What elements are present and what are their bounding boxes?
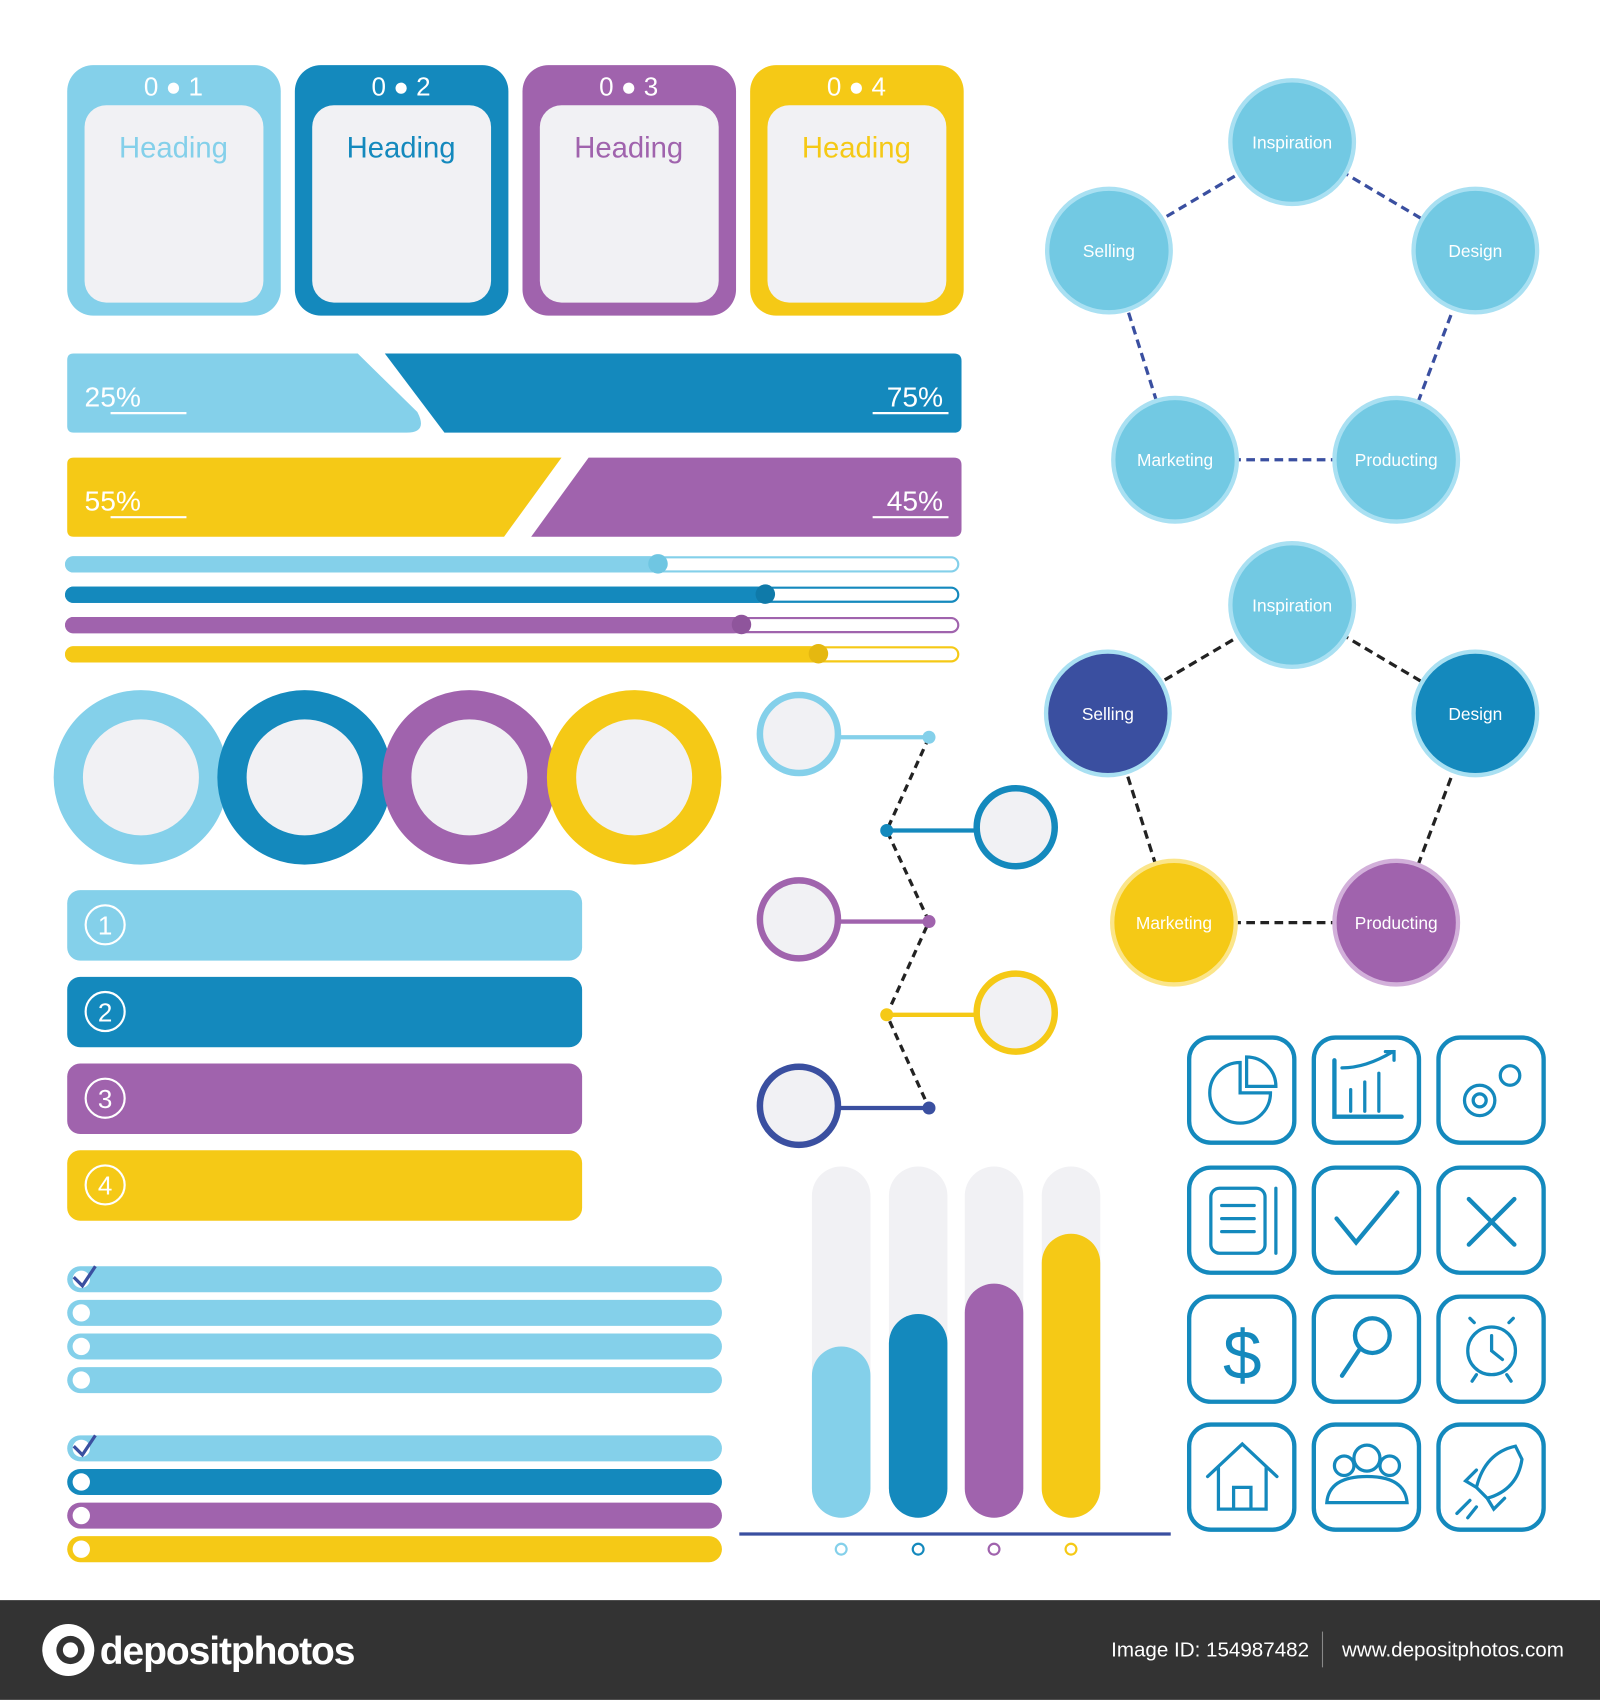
card 03: [522, 65, 736, 316]
percentage bars: 25%: [85, 381, 141, 413]
card 03: Heading: [574, 132, 683, 164]
footer bar: www.depositphotos.com: [1341, 1639, 1564, 1662]
checklist 2: [67, 1435, 722, 1562]
card 02: [295, 65, 508, 316]
sliders: [65, 554, 958, 664]
percentage bars: 55%: [85, 485, 141, 517]
card 01: [67, 65, 281, 316]
percentage bars: 45%: [887, 485, 943, 517]
numbered bars: 3: [98, 1084, 112, 1114]
percentage bars: [67, 354, 962, 537]
pentagon diagram 1: [1047, 80, 1537, 522]
pentagon diagram 2: Producting: [1355, 913, 1438, 933]
footer bar: [0, 1600, 1600, 1700]
card 04: Heading: [802, 132, 911, 164]
footer bar: depositphotos: [100, 1630, 355, 1673]
pentagon diagram 1: Marketing: [1137, 450, 1213, 470]
pentagon diagram 2: Marketing: [1136, 913, 1212, 933]
heading cards: [67, 65, 964, 316]
numbered bars: 4: [98, 1171, 112, 1201]
icon grid: [1189, 1038, 1544, 1530]
card 04: [750, 65, 964, 316]
icon grid: $: [1223, 1316, 1262, 1394]
bar chart: [739, 1167, 1171, 1555]
card 01: 0 ● 1: [144, 72, 203, 102]
card 04: 0 ● 4: [827, 72, 886, 102]
pentagon diagram 1: Selling: [1083, 241, 1135, 261]
card 02: 0 ● 2: [372, 72, 431, 102]
numbered bars: 2: [98, 997, 112, 1027]
card 02: Heading: [347, 132, 456, 164]
pentagon diagram 1: Producting: [1355, 450, 1438, 470]
timeline: [760, 695, 1055, 1145]
numbered bars: [67, 890, 582, 1221]
rings: [68, 705, 707, 850]
pentagon diagram 1: Design: [1448, 241, 1502, 261]
percentage bars: 75%: [887, 381, 943, 413]
footer bar: Image ID: 154987482: [1111, 1639, 1309, 1662]
checklist 1: [67, 1266, 722, 1393]
numbered bars: 1: [98, 911, 112, 941]
pentagon diagram 2: [1046, 543, 1537, 984]
pentagon diagram 2: Design: [1448, 704, 1502, 724]
pentagon diagram 1: Inspiration: [1252, 133, 1332, 153]
card 01: Heading: [119, 132, 228, 164]
pentagon diagram 2: Inspiration: [1252, 596, 1332, 616]
card 03: 0 ● 3: [599, 72, 658, 102]
pentagon diagram 2: Selling: [1082, 704, 1134, 724]
